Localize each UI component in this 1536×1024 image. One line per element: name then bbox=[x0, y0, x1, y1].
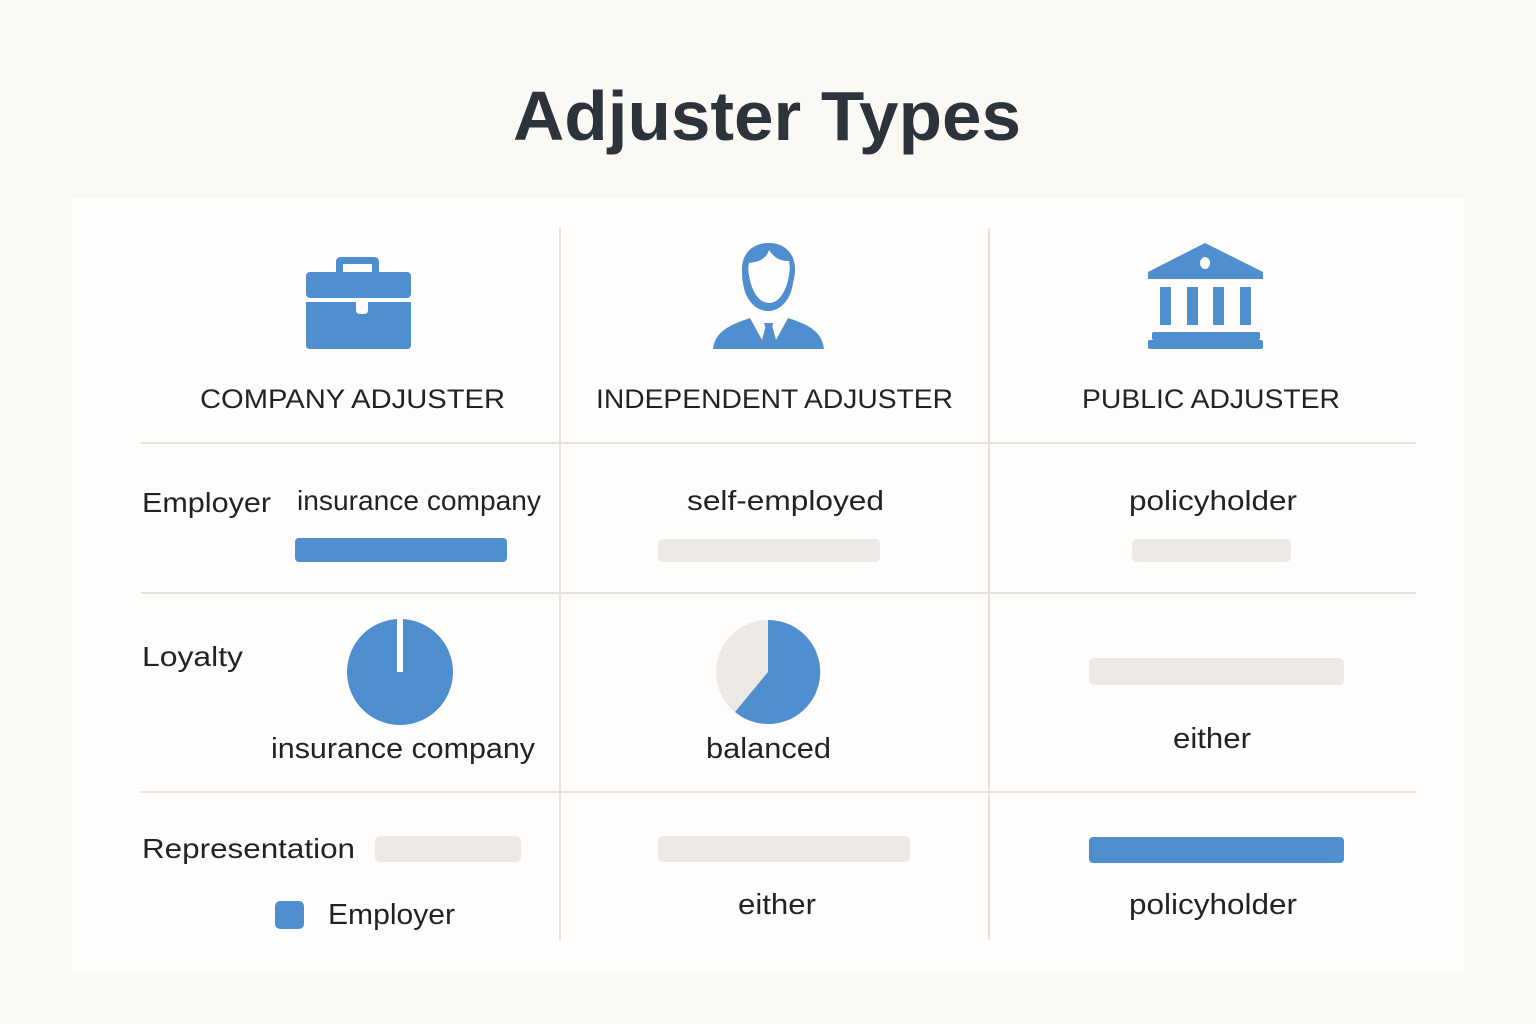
title: Adjuster Types bbox=[513, 77, 1021, 155]
representation: public bbox=[1089, 837, 1344, 921]
loyalty: independent pie: balanced bbox=[706, 733, 831, 765]
representation: company: Employer bbox=[328, 899, 455, 931]
employer: public: policyholder bbox=[1129, 485, 1297, 516]
representation: public: policyholder bbox=[1129, 889, 1297, 921]
loyalty: public bbox=[1089, 658, 1344, 755]
loyalty: public: either bbox=[1173, 723, 1251, 755]
employer: independent bbox=[658, 485, 884, 562]
heading: independent adjuster: INDEPENDENT ADJUSTER bbox=[596, 384, 953, 414]
loyalty: company pie bbox=[271, 619, 536, 765]
employer: company bbox=[295, 485, 541, 562]
row label: loyalty: Loyalty bbox=[142, 641, 243, 672]
loyalty: independent pie bbox=[706, 620, 831, 765]
heading: public adjuster: PUBLIC ADJUSTER bbox=[1082, 384, 1340, 414]
representation: independent: either bbox=[738, 889, 816, 921]
heading: company adjuster: COMPANY ADJUSTER bbox=[200, 384, 505, 414]
representation: independent bbox=[658, 836, 910, 921]
row label: representation: Representation bbox=[142, 833, 355, 864]
row label: employer: Employer bbox=[142, 487, 271, 518]
employer: company: insurance company bbox=[297, 485, 541, 516]
panel: comparison table bbox=[72, 198, 1464, 972]
icon: bank building bbox=[1148, 243, 1263, 349]
employer: independent: self-employed bbox=[687, 485, 884, 516]
loyalty: company pie: insurance company bbox=[271, 733, 536, 765]
employer: public bbox=[1129, 485, 1297, 562]
icon: person bbox=[713, 243, 824, 349]
representation: company bbox=[275, 836, 521, 931]
icon: briefcase bbox=[306, 257, 411, 349]
